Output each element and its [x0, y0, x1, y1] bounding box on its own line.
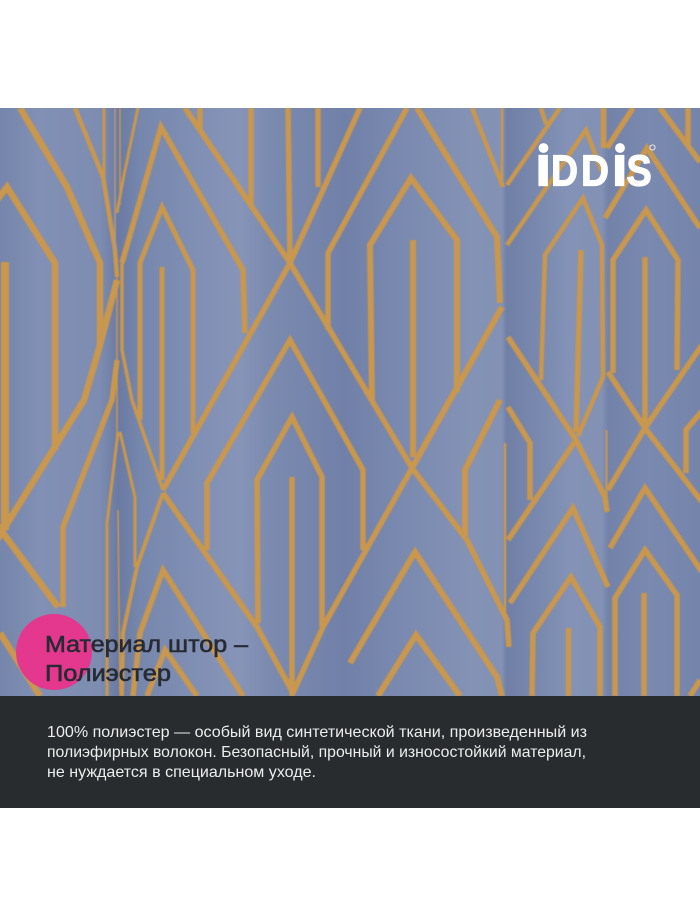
heading: Полиэстер	[45, 660, 171, 686]
description text	[47, 724, 587, 781]
heading: Материал штор –	[45, 631, 248, 657]
description text: полиэфирных волокон. Безопасный, прочный и износостойкий материал,	[47, 744, 586, 761]
description panel	[0, 696, 700, 808]
curtain photo	[0, 108, 700, 696]
narrow gather	[75, 108, 138, 696]
left fold	[0, 108, 117, 696]
pattern: gold geometric lines	[0, 108, 700, 696]
right panels	[507, 108, 700, 696]
logo: iddis: D	[581, 146, 609, 196]
logo: iddis: D	[551, 146, 578, 196]
logo: iddis	[536, 144, 655, 196]
second panel hexagons	[122, 108, 509, 696]
description text: не нуждается в специальном уходе.	[47, 764, 316, 781]
centre panel	[350, 108, 505, 696]
logo: iddis: S	[626, 146, 652, 196]
accent circle	[16, 614, 92, 690]
logo: iddis: I	[612, 146, 627, 196]
heading	[45, 631, 248, 686]
logo: iddis: I	[536, 146, 551, 196]
description text: 100% полиэстер — особый вид синтетической ткани, произведенный из	[47, 724, 587, 741]
